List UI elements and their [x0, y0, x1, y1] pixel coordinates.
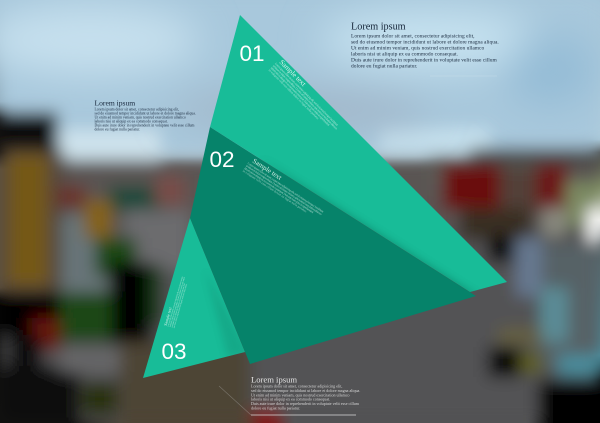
text block: left: laboris nisi ut aliquip ex ea commodo consequat. — [94, 120, 168, 124]
text block: bottom — [251, 374, 361, 410]
text block: bottom: Lorem ipsum — [251, 374, 297, 384]
text block: top right: sed do eiusmod tempor incididunt ut labore et dolore magna aliqua. — [351, 40, 499, 46]
sample text 02: in voluptate velit esse cillum dolore eu fugiat nulla pariatur. — [242, 169, 308, 214]
sample text 02: ut labore et dolore magna aliqua. Ut enim ad minim veniam, quis nostrud exercitation ullamco — [245, 164, 323, 217]
sample text 03: Lorem ipsum dolor sit amet, consectetur adipisicing elit, sed do eiusmod tempor — [167, 276, 184, 327]
sample text 01: laboris nisi ut aliquip ex ea commodo consequat. Duis aute irure dolor in reprehenderit — [270, 66, 331, 127]
panel: triangle piece 3 — [143, 218, 250, 378]
leader line: bottom text — [219, 386, 356, 415]
sample text 02: Lorem ipsum dolor sit amet, consectetur adipisicing elit, sed do eiusmod tempor incididunt — [246, 161, 325, 214]
text block: top right — [351, 22, 500, 76]
sample text 01: in voluptate velit esse cillum dolore eu fugiat nulla pariatur. — [268, 68, 320, 121]
text block: bottom: dolore eu fugiat nulla pariatur. — [251, 406, 300, 410]
text block: top right: dolore eu fugiat nulla pariatur. — [351, 62, 417, 70]
sample text 01: Lorem ipsum dolor sit amet, consectetur adipisicing elit, sed do eiusmod tempor incididunt — [273, 62, 339, 128]
sample text 02: Sample text — [251, 157, 283, 182]
text block: top right: Lorem ipsum — [351, 22, 406, 32]
text block: left: Lorem ipsum dolor sit amet, consectetur adipisicing elit, — [94, 108, 179, 112]
text block: left: Lorem ipsum — [94, 98, 135, 108]
number 02: 02 — [210, 147, 235, 172]
panel: triangle piece 2 — [190, 127, 476, 364]
text block: bottom: sed do eiusmod tempor incididunt ut labore et dolore magna aliqua. — [251, 388, 360, 393]
sample text 03: aute irure dolor in reprehenderit in voluptate velit esse cillum dolore — [173, 284, 188, 329]
text block: left: Duis aute irure dolor in reprehenderit in voluptate velit esse cillum — [94, 124, 195, 128]
text block: left: sed do eiusmod tempor incididunt ut labore et dolore magna aliqua. — [94, 112, 196, 116]
sample text 02: laboris nisi ut aliquip ex ea commodo consequat. Duis aute irure dolor in reprehenderit — [243, 166, 315, 214]
text block: top right: Ut enim ad minim veniam, quis nostrud exercitation ullamco — [351, 46, 484, 52]
text block: bottom: laboris nisi ut aliquip ex ea commodo consequat. — [251, 397, 330, 402]
sample text 01: ut labore et dolore magna aliqua. Ut enim ad minim veniam, quis nostrud exercitation ullamco — [271, 64, 339, 131]
sample text 03: Sample text — [163, 306, 173, 326]
text block: bottom: Lorem ipsum dolor sit amet, consectetur adipisicing elit, — [251, 384, 342, 390]
sample text 03 — [163, 275, 190, 329]
text block: bottom: Ut enim ad minim veniam, quis nostrud exercitation ullamco — [251, 392, 350, 398]
text block: top right: Lorem ipsum dolor sit amet, consectetur adipisicing elit, — [351, 34, 475, 40]
sample text 03: exercitation ullamco laboris nisi ut aliquip ex ea commodo consequat. Duis — [171, 283, 186, 328]
number 01: 01 — [240, 41, 265, 66]
text block: top right: Duis aute irure dolor in reprehenderit in voluptate velit esse cillum — [351, 58, 498, 64]
text block: bottom: Duis aute irure dolor in reprehenderit in voluptate velit esse cillum — [251, 401, 360, 406]
text block: top right: laboris nisi ut aliquip ex ea commodo consequat. — [351, 52, 458, 58]
text block: left: Ut enim ad minim veniam, quis nostrud exercitation ullamco — [94, 116, 186, 120]
text block: left: dolore eu fugiat nulla pariatur. — [94, 128, 140, 132]
sample text 03: incididunt ut labore et dolore magna aliqua. Ut enim ad minim veniam, quis nostrud — [169, 277, 186, 327]
number 03: 03 — [162, 339, 187, 364]
sample text 01: Sample text — [278, 58, 307, 88]
panel: triangle piece 1 — [210, 15, 507, 297]
text block: left — [94, 98, 197, 132]
